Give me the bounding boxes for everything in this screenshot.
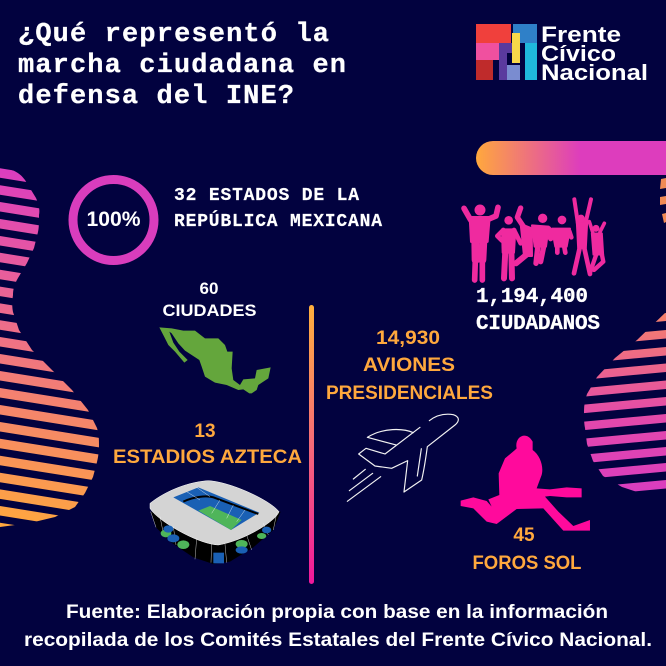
person 3 [516, 208, 532, 263]
icon: stadium [150, 481, 281, 564]
logo: Frente Cívico Nacional: Cívico [541, 41, 616, 66]
stat: 45 foros sol: 45 [513, 525, 535, 546]
person 7 [589, 222, 604, 273]
gradient bar [476, 141, 666, 175]
stat: 1,194,400 ciudadanos: CIUDADANOS [476, 313, 600, 336]
person 6 [574, 199, 591, 274]
source note: recopilada de los Comités Estatales del Frente Cívico Nacional. [24, 629, 652, 651]
stat: 13 estadios azteca [113, 421, 302, 468]
person 1 [464, 207, 498, 280]
stat: 13 estadios azteca: ESTADIOS AZTECA [113, 447, 302, 468]
stat: 1,194,400 ciudadanos: 1,194,400 [476, 286, 588, 309]
stat: 1,194,400 ciudadanos [476, 286, 600, 336]
stat: 60 ciudades [162, 279, 256, 320]
text: 32 estados [174, 186, 382, 232]
stat: 13 estadios azteca: 13 [194, 421, 216, 442]
icon: map of Mexico [159, 327, 271, 393]
ring: 100% [73, 180, 154, 260]
decorative blob: right stripes [580, 313, 666, 496]
icon: airplane [347, 414, 458, 501]
stat: 45 foros sol [472, 525, 582, 574]
source note [24, 601, 652, 651]
ring: 100%: 100% [86, 208, 141, 231]
text: 32 estados: REPÚBLICA MEXICANA [174, 210, 382, 232]
stat: 14,930 aviones presidenciales [326, 328, 493, 404]
logo: Frente Cívico Nacional [476, 22, 648, 85]
icon: crowd silhouettes [464, 199, 604, 280]
title: ¿Qué representó la [18, 20, 329, 50]
logo: Frente Cívico Nacional: Nacional [541, 60, 648, 85]
stat: 14,930 aviones presidenciales: 14,930 [376, 328, 440, 349]
stat: 60 ciudades: CIUDADES [162, 301, 256, 320]
stat: 14,930 aviones presidenciales: AVIONES [363, 355, 455, 376]
title [18, 20, 346, 112]
logo: Frente Cívico Nacional: Frente [541, 22, 621, 47]
person 4 [532, 216, 551, 263]
decorative blob: top right stripes [660, 178, 666, 223]
title: marcha ciudadana en [18, 51, 346, 81]
stat: 45 foros sol: FOROS SOL [472, 553, 582, 574]
stat: 60 ciudades: 60 [200, 279, 218, 298]
icon: guitarist silhouette [461, 436, 590, 531]
source note: Fuente: Elaboración propia con base en la información [66, 601, 608, 623]
person 2 [497, 218, 521, 278]
decorative blob: left stripes [0, 168, 99, 527]
title: defensa del INE? [18, 82, 294, 112]
stat: 14,930 aviones presidenciales: PRESIDENCIALES [326, 383, 493, 404]
text: 32 estados: 32 ESTADOS DE LA [174, 186, 359, 206]
person 5 [551, 218, 571, 253]
divider line [309, 305, 314, 584]
